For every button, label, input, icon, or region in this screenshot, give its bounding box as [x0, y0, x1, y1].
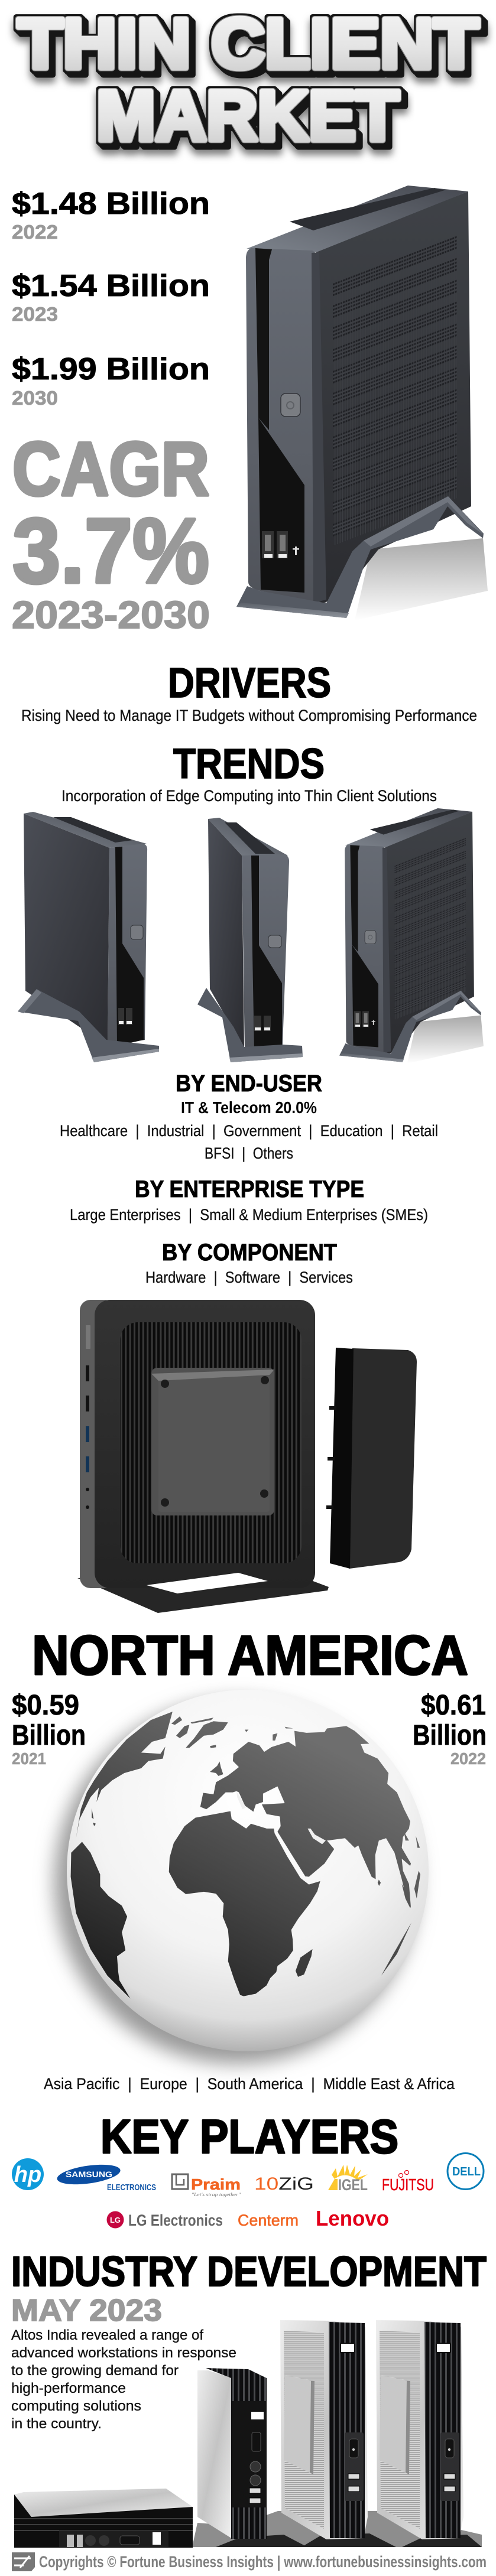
- text: industry development description: to the growing demand for: [11, 2363, 179, 2379]
- heading: by enterprise type: BY ENTERPRISE TYPE: [135, 1176, 364, 1202]
- logo: fujitsu: FUJITSU: [382, 2175, 434, 2194]
- panel: company logos: [12, 2153, 484, 2230]
- icon: device centre view: [197, 818, 303, 1062]
- logo: samsung: SAMSUNG: [66, 2170, 112, 2179]
- icon: fortune business insights logo: [12, 2552, 35, 2571]
- text: end-user list continued: BFSI | Others: [205, 1144, 293, 1162]
- heading: by component: BY COMPONENT: [162, 1240, 337, 1266]
- title: Thin Client Market: [18, 4, 479, 155]
- icon: main thin client device: [236, 186, 488, 620]
- logo: praim: "Let's strap together": [192, 2192, 241, 2197]
- CAGR period: 2023-2030: [12, 593, 210, 636]
- logo: hp: [12, 2158, 44, 2190]
- text: industry development description: high-performance: [11, 2380, 126, 2396]
- logo: hp: hp: [14, 2162, 41, 2187]
- heading: trends: TRENDS: [173, 741, 325, 788]
- panel: north america 2022 value: [413, 1690, 487, 1768]
- icon: globe: [54, 1690, 429, 2064]
- text: end-user list: Healthcare | Industrial | Government | Education | Retail: [60, 1122, 438, 1140]
- footer: copyright: [12, 2552, 487, 2571]
- stat 2030 year: 2030: [12, 387, 58, 409]
- panel: segment by end-user: [60, 1071, 438, 1162]
- panel: segment by component: [145, 1240, 353, 1286]
- text: industry development description: [11, 2327, 236, 2432]
- stat 2022 value: $1.48 Billion: [12, 187, 210, 221]
- panel: market size stats: [12, 187, 210, 636]
- text: trends description: Incorporation of Edge Computing into Thin Client Solutions: [61, 787, 437, 805]
- CAGR value: 3.7%: [12, 500, 209, 603]
- text: other regions: Asia Pacific | Europe | South America | Middle East & Africa: [44, 2075, 455, 2093]
- logo: centerm: Centerm: [238, 2211, 299, 2229]
- title line 1: THIN CLIENT: [18, 4, 479, 83]
- heading: drivers: DRIVERS: [168, 660, 331, 707]
- logo: lenovo: Lenovo: [316, 2206, 389, 2230]
- text: component list: Hardware | Software | Services: [145, 1269, 353, 1286]
- text: enterprise list: Large Enterprises | Small & Medium Enterprises (SMEs): [70, 1206, 428, 1224]
- logo: samsung: [56, 2161, 156, 2193]
- stat 2023 value: $1.54 Billion: [12, 269, 210, 303]
- logo: samsung: ELECTRONICS: [107, 2183, 156, 2193]
- text: leading share: IT & Telecom 20.0%: [181, 1098, 317, 1117]
- value unit 2021: Billion: [12, 1720, 86, 1751]
- text: industry development description: in the country.: [11, 2416, 102, 2432]
- heading: key players: KEY PLAYERS: [101, 2110, 398, 2164]
- text: industry development description: Altos India revealed a range of: [11, 2327, 203, 2343]
- logo: 10zig: 10 ZiG: [254, 2174, 314, 2194]
- text: industry development description: advanced workstations in response: [11, 2345, 236, 2361]
- logo: igel: IGEL: [338, 2176, 368, 2194]
- logo: lg electronics: LG Electronics: [128, 2211, 223, 2229]
- stat 2022 year: 2022: [12, 221, 58, 243]
- heading: north america: NORTH AMERICA: [32, 1624, 468, 1687]
- logo: dell: [448, 2153, 484, 2190]
- logo: lg electronics: [106, 2211, 223, 2229]
- stat 2030 value: $1.99 Billion: [12, 352, 210, 386]
- panel: segment by enterprise type: [70, 1176, 428, 1224]
- icon: device left view: [18, 812, 159, 1062]
- icon: thin client rear view with cover: [77, 1300, 417, 1613]
- year 2021: 2021: [12, 1749, 46, 1768]
- value 2021: $0.59: [12, 1690, 79, 1721]
- stat 2023 year: 2023: [12, 303, 58, 325]
- logo: fujitsu: [382, 2171, 434, 2194]
- icon: device right view: [339, 808, 484, 1063]
- logo: praim: Praim: [191, 2175, 241, 2193]
- panel: north america 2021 value: [12, 1690, 86, 1768]
- value 2022: $0.61: [421, 1690, 486, 1721]
- heading: by end-user: BY END-USER: [176, 1071, 322, 1097]
- logo: praim: [172, 2174, 241, 2197]
- logo: lg electronics: LG: [110, 2216, 121, 2224]
- CAGR label: CAGR: [12, 427, 209, 512]
- title line 2: MARKET: [96, 76, 399, 155]
- year 2022: 2022: [450, 1749, 486, 1768]
- logo: dell: DELL: [452, 2165, 481, 2178]
- text: industry development description: computing solutions: [11, 2398, 141, 2414]
- logo: igel: [328, 2165, 368, 2194]
- subheading: may 2023: MAY 2023: [11, 2294, 162, 2328]
- icon: workstation product group: [14, 2320, 482, 2548]
